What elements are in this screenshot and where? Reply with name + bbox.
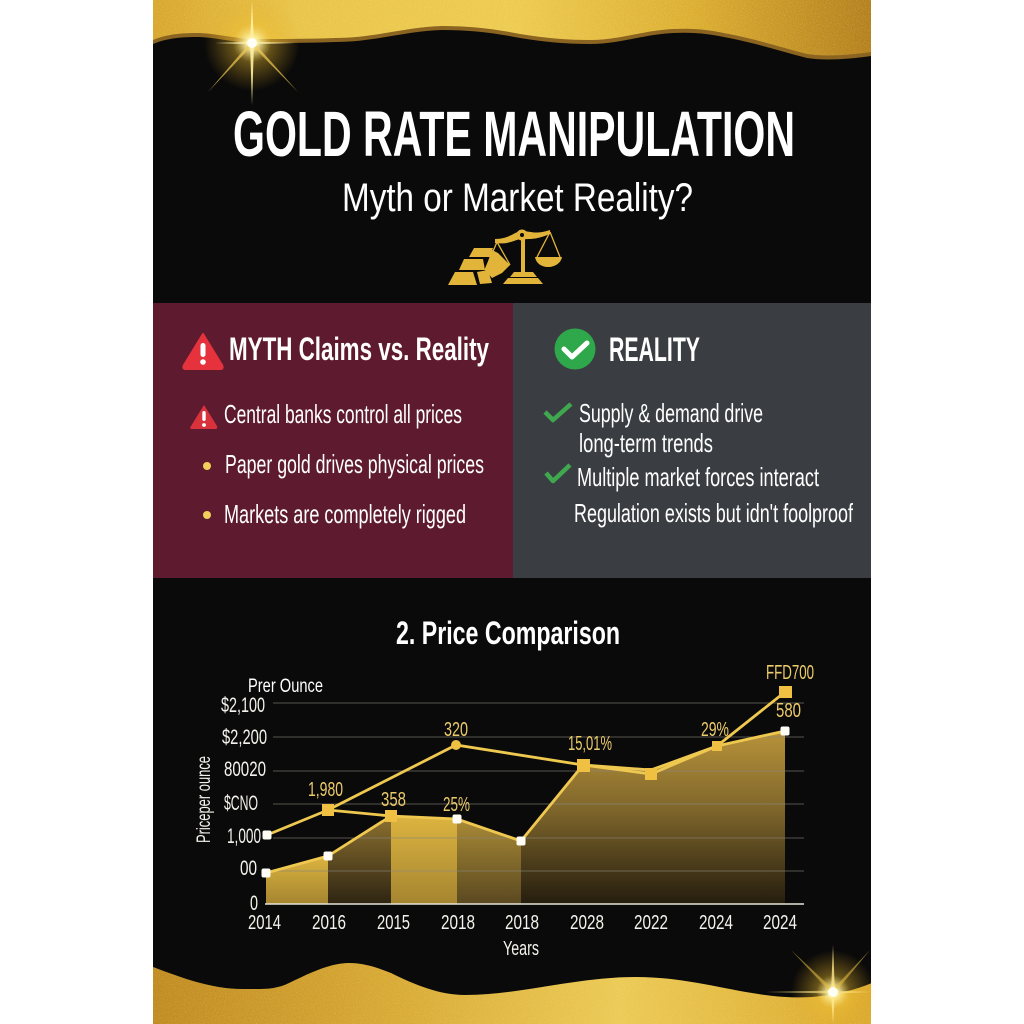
lower price line: [266, 731, 785, 873]
reality item 1: Supply & demand drive: [579, 398, 763, 428]
reality heading: REALITY: [609, 331, 700, 369]
data labels: 580: [776, 700, 801, 722]
myth heading: MYTH Claims vs. Reality: [229, 331, 489, 367]
connector line: [328, 810, 391, 816]
data labels: 25%: [443, 794, 470, 816]
myth item 1: Central banks control all prices: [224, 399, 462, 429]
x-axis labels: 2018: [505, 912, 539, 934]
subtitle: Myth or Market Reality?: [342, 176, 693, 220]
myth item 2: Paper gold drives physical prices: [225, 449, 484, 479]
y-axis labels: 80020: [224, 758, 266, 781]
x-axis labels: 2015: [377, 912, 410, 934]
y-axis labels: $CNO: [224, 792, 258, 815]
x-axis labels: [248, 912, 797, 934]
x-axis labels: 2018: [441, 912, 475, 934]
y-axis labels: 0: [250, 892, 258, 915]
bottom gold wave banner: [153, 960, 871, 1024]
data labels: FFD700: [766, 662, 814, 684]
icon: check mark: [545, 404, 571, 420]
white data markers: [262, 726, 790, 878]
data labels: 29%: [701, 719, 729, 741]
bullet dot: [203, 462, 211, 470]
x-axis title: Years: [503, 938, 539, 960]
reality item 1: long-term trends: [579, 428, 713, 458]
x-axis labels: 2024: [763, 912, 797, 934]
x-axis labels: 2022: [634, 912, 668, 934]
icon: red warning triangle: [183, 334, 223, 369]
poster background: [153, 0, 871, 1024]
upper price line: [267, 692, 785, 835]
panel: reality: [513, 303, 871, 578]
top gold wave banner: [153, 0, 871, 64]
chart heading: 2. Price Comparison: [396, 615, 620, 651]
x-axis labels: 2014: [248, 912, 281, 934]
line and area chart: price comparison: [194, 662, 814, 960]
y-axis labels: $2,200: [222, 726, 267, 749]
y-axis title: Priceper ounce: [194, 756, 215, 843]
reality item 1: [579, 398, 763, 458]
data labels: 320: [444, 719, 468, 741]
icon: check mark: [546, 465, 570, 481]
y-axis labels: 1,000: [227, 825, 261, 848]
reality item 3: Regulation exists but idn't foolproof: [574, 498, 854, 528]
data labels: 358: [381, 789, 406, 811]
reality item 2: Multiple market forces interact: [577, 462, 820, 492]
x-axis labels: 2028: [570, 912, 604, 934]
y-axis unit label: Prer Ounce: [248, 676, 323, 697]
bottom sparkle star: [766, 945, 875, 1024]
x-axis labels: 2016: [312, 912, 346, 934]
panel: myth claims: [153, 303, 513, 578]
x-axis labels: 2024: [699, 912, 733, 934]
area fill under price line: [266, 731, 785, 904]
data labels: 1,980: [308, 779, 343, 801]
icon: small warning triangle: [190, 405, 217, 429]
myth item 3: Markets are completely rigged: [224, 499, 466, 529]
gold data markers: [322, 686, 792, 822]
y-axis labels: $2,100: [221, 694, 265, 717]
icon: gold bars and scales of justice: [448, 230, 562, 285]
top sparkle star: [204, 0, 300, 105]
bullet dot: [203, 511, 211, 519]
icon: green check circle: [554, 328, 596, 370]
chart baseline: [265, 903, 804, 905]
data labels: 15,01%: [568, 733, 612, 755]
y-axis labels: 00: [240, 857, 257, 880]
chart grid lines: [273, 703, 804, 871]
data labels: [308, 662, 814, 816]
y-axis labels: [221, 694, 267, 915]
